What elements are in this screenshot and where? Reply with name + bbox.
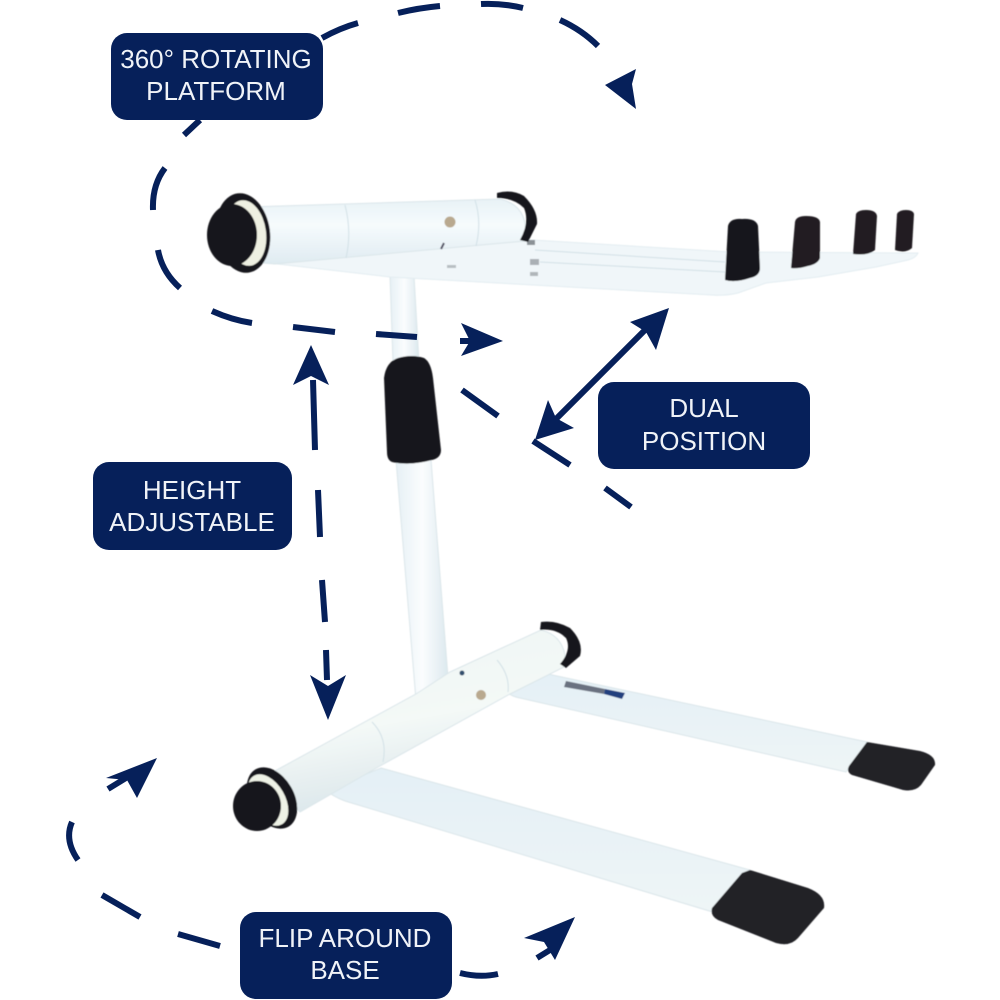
platform plate: [278, 210, 918, 295]
stand: base crossbar: [233, 622, 581, 838]
stand: lower pole: [396, 460, 449, 700]
callout: height adjustable: ADJUSTABLE: [109, 507, 275, 537]
stand: front leg: [326, 768, 824, 944]
callout: flip around base: [240, 912, 452, 999]
dashed arc: flip around base: [69, 758, 575, 976]
callout: dual position: DUAL: [669, 393, 739, 423]
dashed arc: dual position: [462, 390, 631, 507]
arrow: dual position: [535, 308, 669, 440]
stand: rear leg: [505, 673, 935, 790]
callout: height adjustable: HEIGHT: [143, 475, 241, 505]
callout: dual position: POSITION: [642, 426, 766, 456]
platform tube: [207, 190, 537, 276]
callout: 360 rotating platform: PLATFORM: [146, 76, 286, 106]
arrow: height adjustable: [293, 345, 346, 720]
callout: flip around base: FLIP AROUND: [259, 923, 431, 953]
callout: 360 rotating platform: [111, 33, 323, 120]
stand photograph: [207, 190, 935, 944]
callout: height adjustable: [93, 462, 292, 550]
callout: flip around base: BASE: [310, 955, 380, 985]
stand: upper pole: [390, 276, 419, 362]
dashed circle: rotating platform: [153, 4, 636, 356]
stand: height collar: [384, 356, 441, 464]
callout: dual position: [598, 382, 810, 469]
callout: 360 rotating platform: 360° ROTATING: [120, 44, 312, 74]
